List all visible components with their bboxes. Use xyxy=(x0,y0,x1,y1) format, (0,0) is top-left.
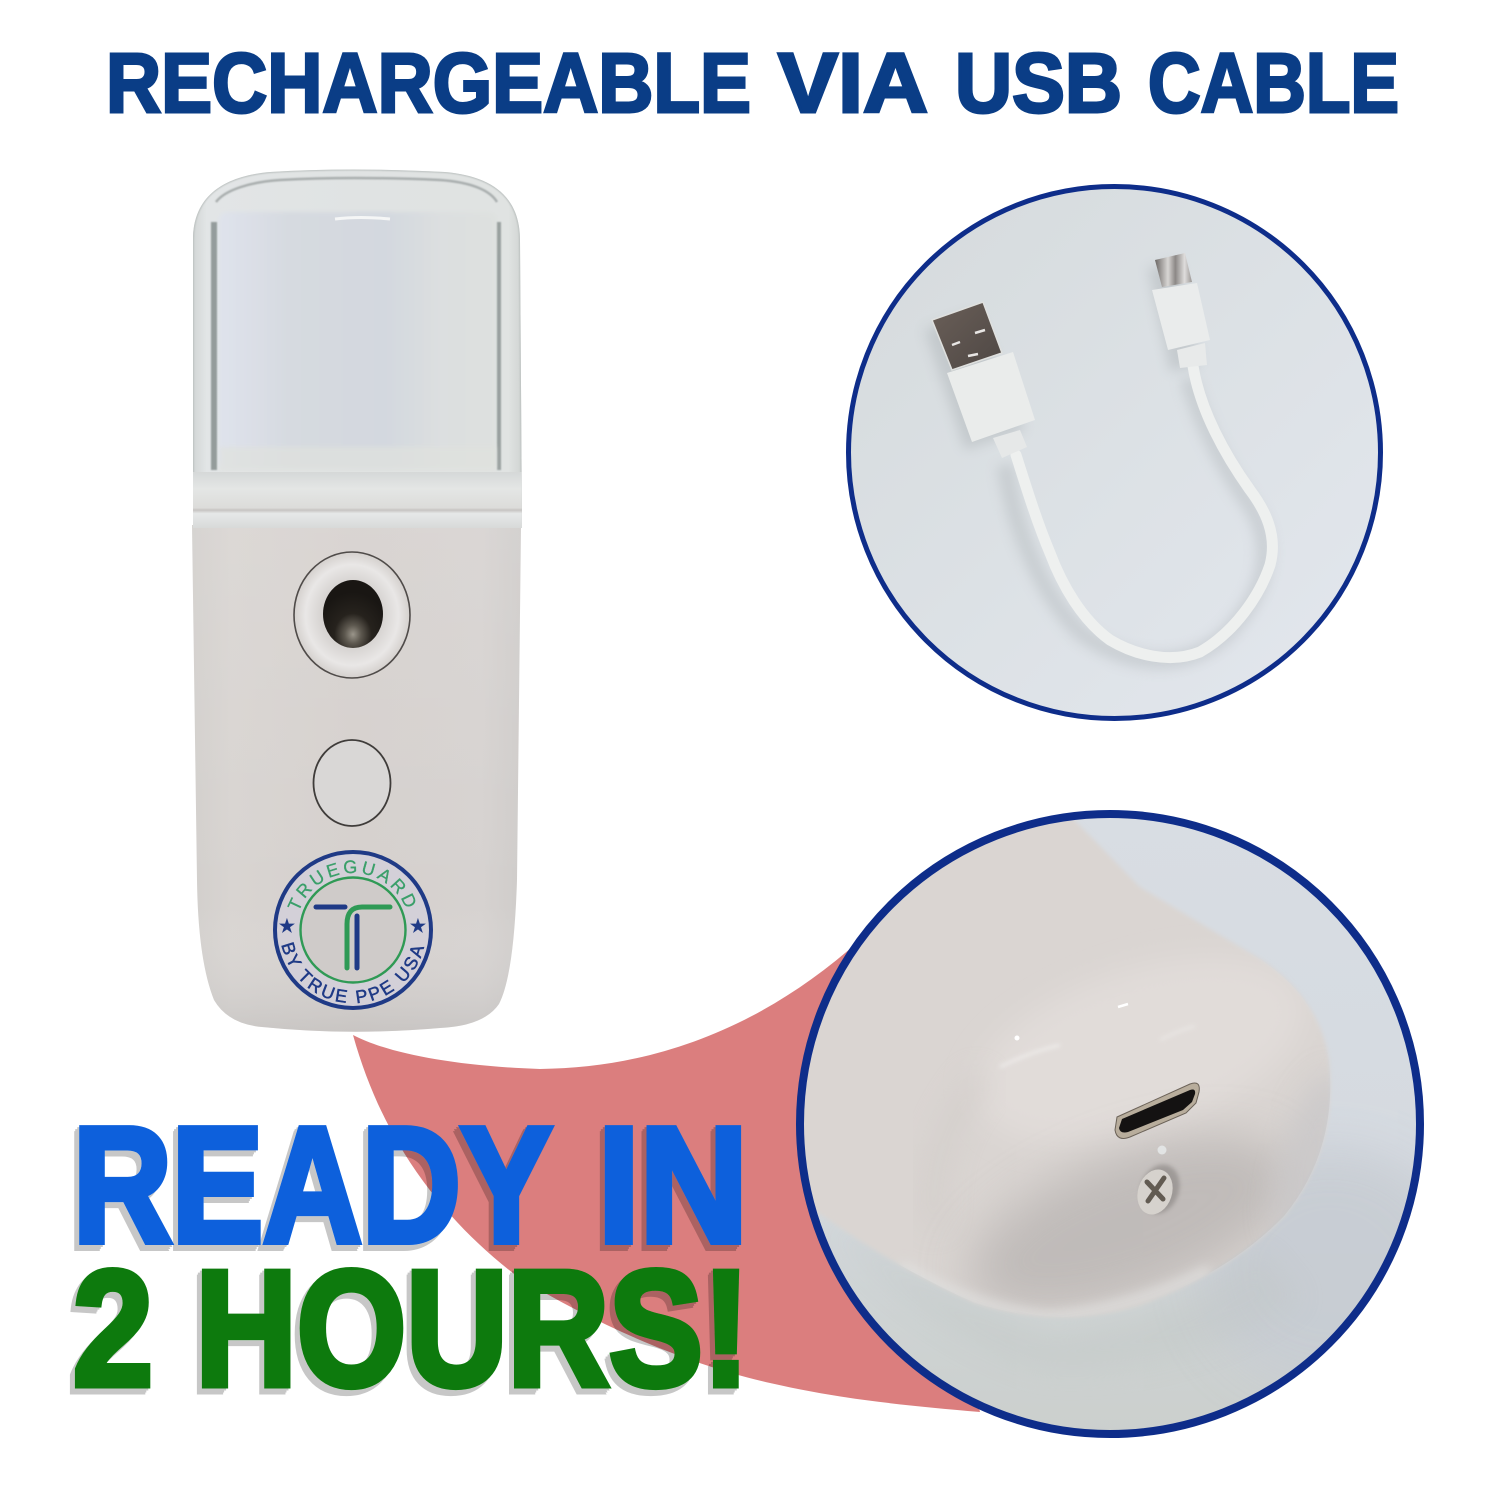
lower right background xyxy=(1249,1159,1408,1274)
panel: USB cable circle xyxy=(848,186,1380,718)
cable shadow xyxy=(1005,378,1265,661)
plug shadows xyxy=(925,262,1200,450)
screw xyxy=(1138,1163,1181,1215)
USB-A plug xyxy=(932,302,1035,458)
title xyxy=(106,36,1399,130)
surface highlights xyxy=(1002,1045,1056,1066)
headline: ready in: IN xyxy=(598,1094,748,1276)
badge star left: ★ xyxy=(279,916,296,936)
badge text bottom: BY TRUE PPE USA xyxy=(281,942,424,1004)
callout wedge: pink zoom beam xyxy=(353,940,980,1412)
device end silhouette xyxy=(804,820,1329,1293)
underside shadow xyxy=(962,1126,1282,1312)
title: CABLE xyxy=(1148,36,1399,130)
device body xyxy=(192,525,521,1032)
panel: charging port circle xyxy=(796,810,1424,1438)
T monogram xyxy=(316,907,390,968)
USB cable wire xyxy=(1016,366,1272,658)
micro-USB plug xyxy=(1152,253,1210,368)
right side shade xyxy=(1294,1083,1330,1191)
floor shadow under device xyxy=(830,1225,1300,1371)
bottom rim reflection xyxy=(926,1267,1209,1317)
circle border xyxy=(848,186,1380,718)
circle border xyxy=(800,814,1420,1434)
headline: 2 hours: 2 xyxy=(73,1237,153,1420)
badge text top: TRUEGUARD xyxy=(287,860,416,908)
title: USB xyxy=(955,36,1122,130)
crease shading xyxy=(934,1075,985,1230)
power button xyxy=(314,740,390,826)
headline: ready in: READY xyxy=(73,1094,552,1276)
micro-USB port xyxy=(1115,1083,1199,1138)
title: RECHARGEABLE xyxy=(106,36,751,130)
logo: TrueGuard badge xyxy=(273,850,433,1010)
title: VIA xyxy=(778,36,928,130)
clear dome cap xyxy=(190,165,525,530)
indicator dot xyxy=(1158,1146,1166,1154)
headline: 2 hours: HOURS! xyxy=(196,1237,750,1420)
badge star right: ★ xyxy=(410,916,427,936)
mist nozzle xyxy=(294,552,410,678)
end-cap bright face xyxy=(954,921,1326,1179)
product: facial mister device xyxy=(192,170,522,1032)
